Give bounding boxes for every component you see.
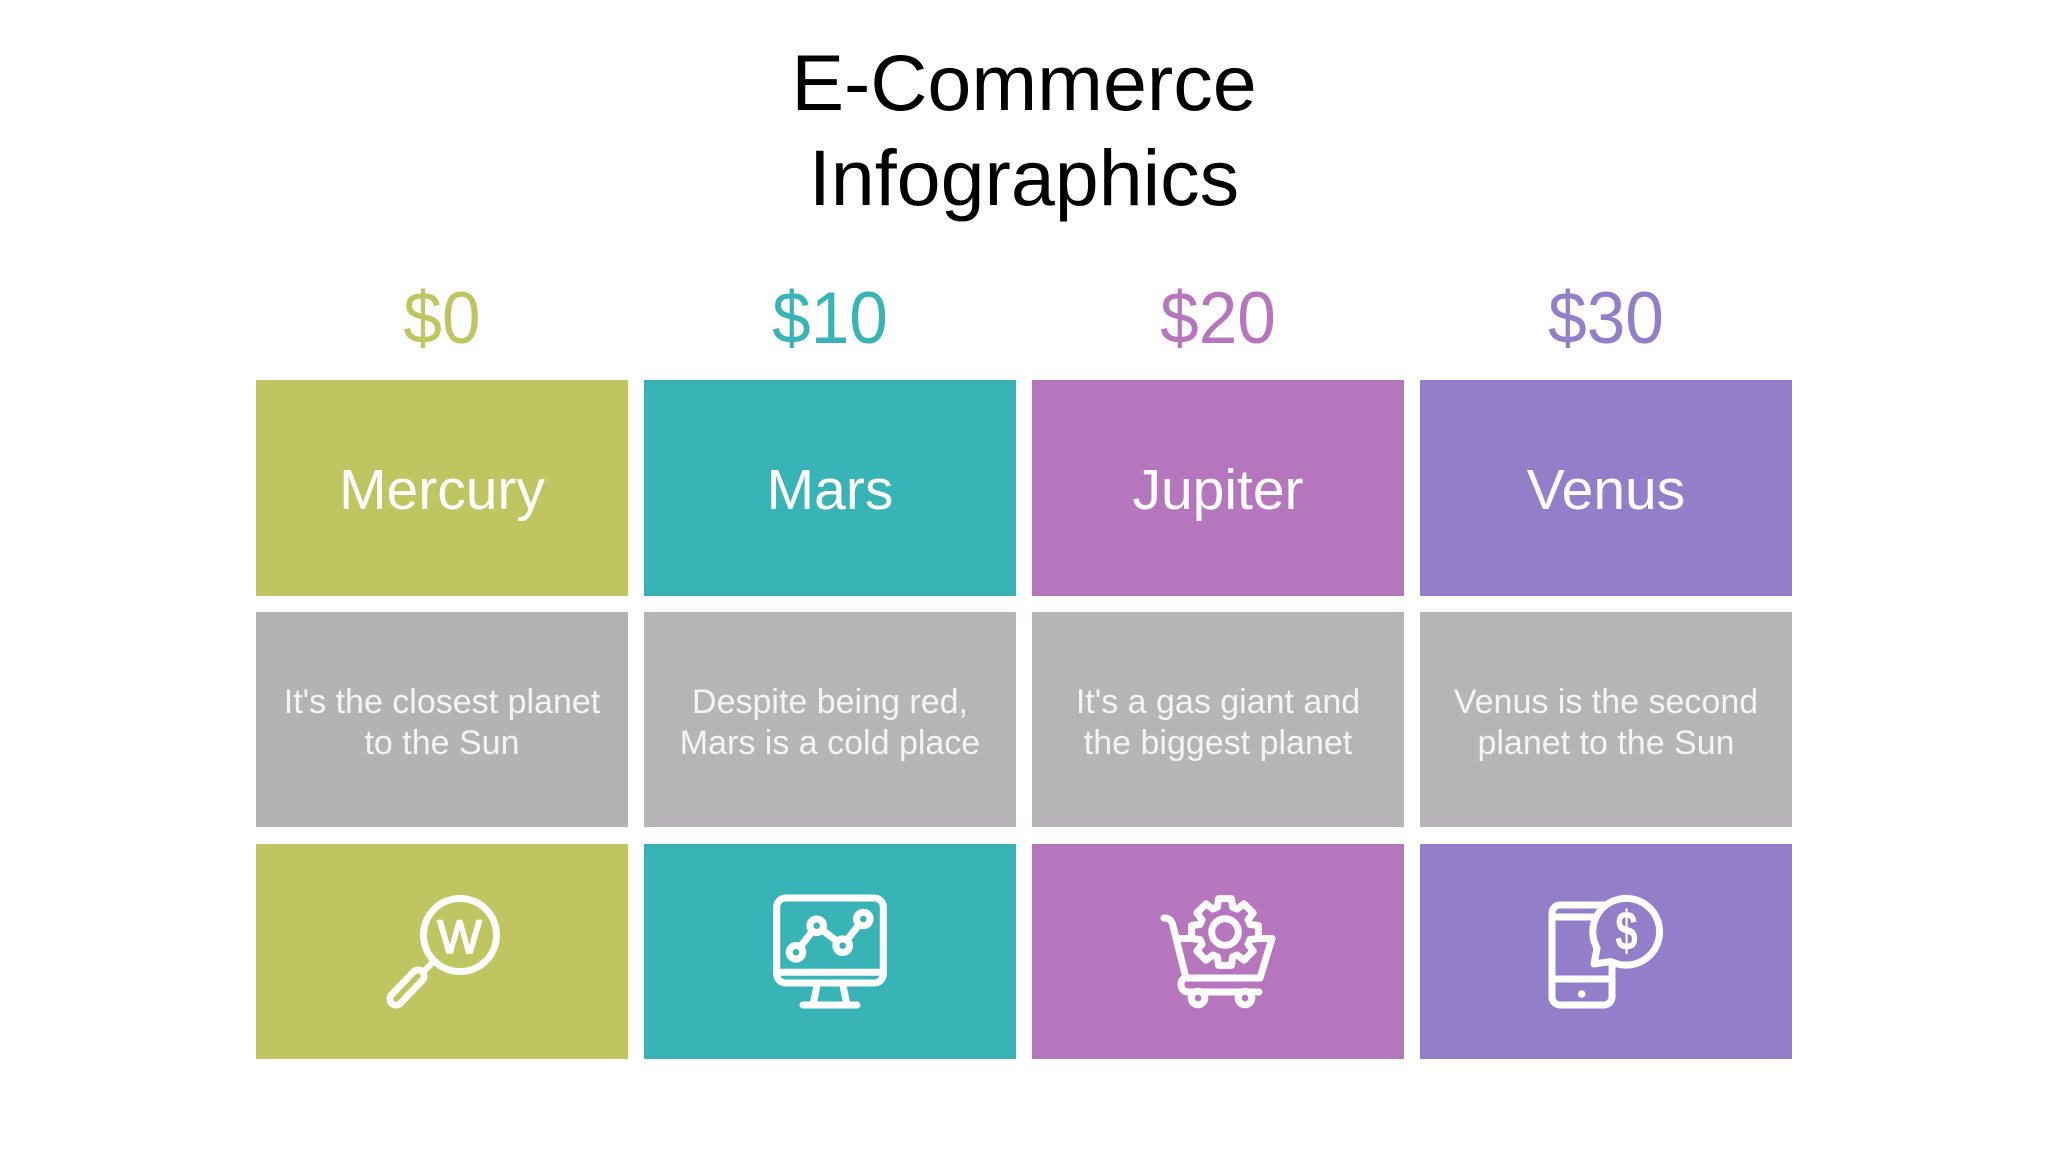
icon: magnifying glass with W: W <box>437 910 482 963</box>
price: $20: $20 <box>1160 278 1276 359</box>
panel: Mars description <box>644 612 1016 827</box>
panel: Venus name <box>1420 380 1792 596</box>
price: $0: $0 <box>403 278 481 359</box>
panel: Venus description: planet to the Sun <box>1477 724 1735 762</box>
panel: Mercury name: Mercury <box>339 458 545 522</box>
panel: Jupiter description <box>1032 612 1404 827</box>
panel: Venus icon background <box>1420 844 1792 1059</box>
icon: phone with dollar speech bubble <box>1552 898 1660 1005</box>
panel: Mercury name <box>256 380 628 596</box>
panel: Jupiter icon background <box>1032 844 1404 1059</box>
panel: Venus name: Venus <box>1527 458 1685 522</box>
panel: Mars icon background <box>644 844 1016 1059</box>
icon: monitor with line chart <box>777 898 883 1005</box>
title: E-Commerce <box>791 38 1257 127</box>
panel: Mars description: Mars is a cold place <box>680 724 980 762</box>
price: $10: $10 <box>772 278 888 359</box>
panel: Mars description: Despite being red, <box>692 683 968 721</box>
panel: Jupiter description: It's a gas giant and <box>1076 683 1360 721</box>
panel: Jupiter name <box>1032 380 1404 596</box>
panel: Mars name: Mars <box>767 458 893 522</box>
title <box>791 38 1257 222</box>
panel: Mercury description: It's the closest planet <box>284 683 600 721</box>
panel: Mercury icon background <box>256 844 628 1059</box>
panel: Mercury description <box>256 612 628 827</box>
panel: Venus description <box>1420 612 1792 827</box>
panel: Venus description: Venus is the second <box>1454 683 1758 721</box>
panel: Jupiter description: the biggest planet <box>1084 724 1352 762</box>
title: Infographics <box>809 133 1239 222</box>
panel: Mars name <box>644 380 1016 596</box>
icon: shopping cart with gear <box>1164 899 1272 1005</box>
panel: Jupiter name: Jupiter <box>1132 458 1304 522</box>
panel: Mercury description: to the Sun <box>364 724 520 762</box>
icon: magnifying glass with W <box>396 898 496 999</box>
icon: phone with dollar speech bubble: $ <box>1615 901 1638 963</box>
price: $30: $30 <box>1548 278 1664 359</box>
